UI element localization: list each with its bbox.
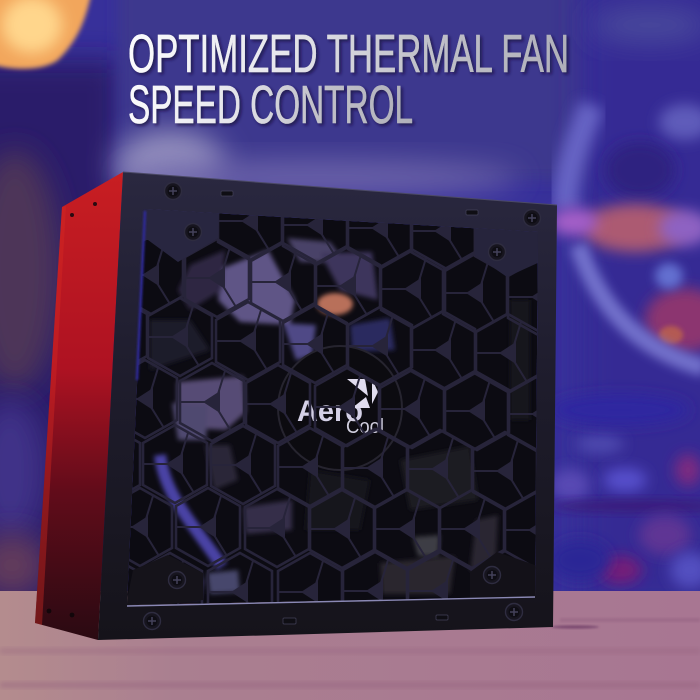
- frame screws: [144, 182, 540, 630]
- black front frame: [98, 172, 557, 640]
- top edge highlight: [123, 172, 557, 205]
- frame slots: [221, 191, 478, 624]
- title: [128, 24, 569, 135]
- table shadow: [551, 625, 599, 629]
- Aerocool logo: [298, 379, 383, 433]
- fan blades: [150, 238, 530, 600]
- power supply unit: [35, 172, 605, 640]
- fan hub: [278, 346, 402, 470]
- red side panel: [35, 172, 123, 640]
- title: SPEED CONTROL: [128, 75, 413, 135]
- orange glow through the fan: [317, 293, 353, 315]
- solid grille corners: [125, 205, 542, 610]
- orange light blob, top left: [0, 0, 92, 69]
- bottom inner edge highlight: [127, 597, 535, 606]
- Aerocool logo: Aero: [297, 395, 363, 428]
- Aerocool logo: Cool: [346, 416, 384, 438]
- blue cable: [160, 455, 222, 566]
- honeycomb grille: [127, 209, 538, 605]
- fan behind the grille: [127, 209, 538, 605]
- blue inner edge glow: [137, 211, 145, 380]
- wooden table surface: [0, 591, 700, 700]
